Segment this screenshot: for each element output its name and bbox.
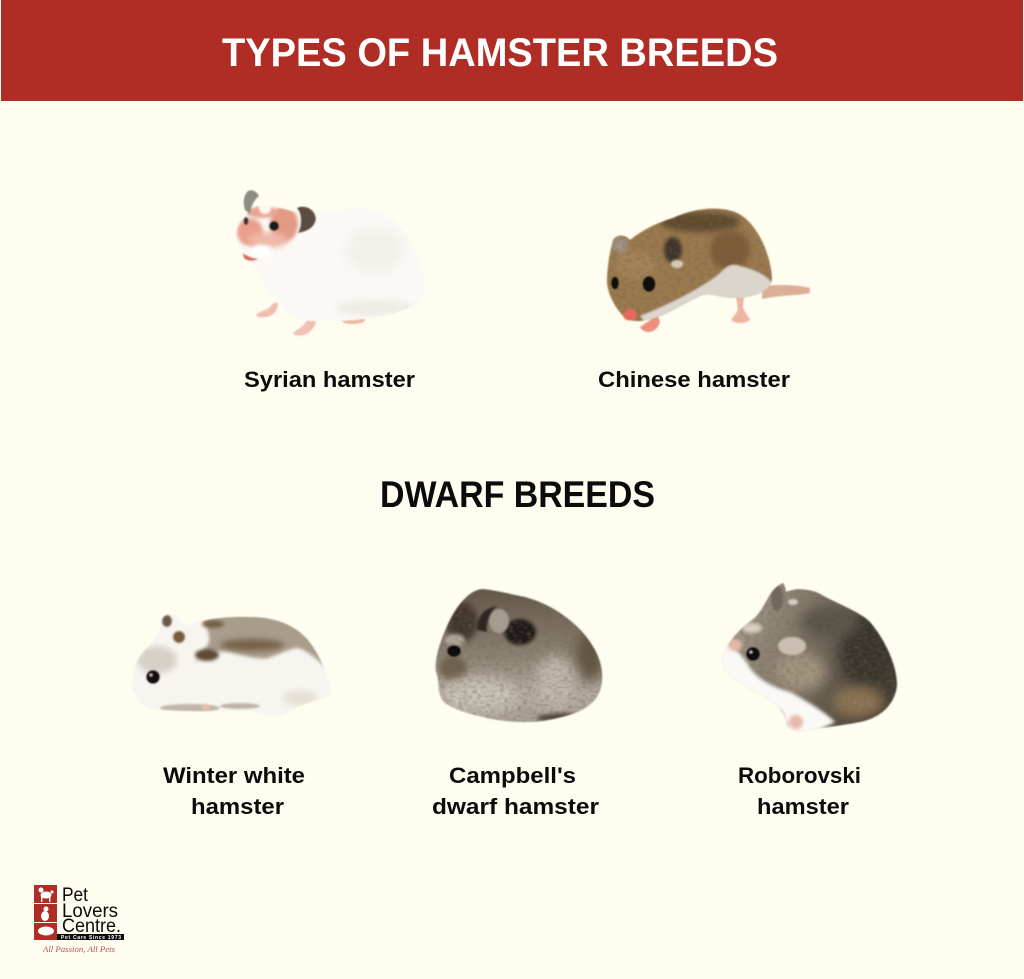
label: Chinese hamster: Chinese hamster — [598, 367, 790, 392]
illustration: Syrian hamster — [236, 190, 412, 336]
illustration: Winter white hamster — [135, 614, 324, 712]
panel: Syrian hamster — [236, 190, 412, 336]
label: Roborovski hamster: hamster — [757, 794, 849, 819]
logo wordmark — [62, 885, 121, 937]
label: Syrian hamster: Syrian hamster — [244, 367, 415, 392]
label: Campbell's dwarf hamster: Campbell's — [449, 763, 576, 788]
panel: Campbell's dwarf hamster — [434, 588, 604, 723]
panel: Winter white hamster — [135, 614, 324, 712]
title banner — [1, 0, 1023, 101]
logo wordmark: Centre. — [62, 916, 121, 937]
illustration: Roborovski hamster — [726, 582, 898, 732]
label: Winter white hamster: hamster — [191, 794, 284, 819]
label: Winter white hamster: Winter white — [163, 763, 305, 788]
illustration: Campbell's dwarf hamster — [434, 588, 604, 723]
title: TYPES OF HAMSTER BREEDS — [222, 31, 778, 75]
label: Campbell's dwarf hamster — [432, 763, 599, 819]
label: Campbell's dwarf hamster: dwarf hamster — [432, 794, 599, 819]
icon: cat tile — [34, 904, 57, 922]
panel: Chinese hamster — [600, 205, 810, 332]
label: Roborovski hamster — [738, 763, 861, 819]
label: Roborovski hamster: Roborovski — [738, 763, 861, 788]
logo: Pet Lovers Centre — [34, 885, 124, 954]
panel: Roborovski hamster — [726, 582, 898, 732]
icon: dog tile — [34, 885, 57, 903]
logo tagline: All Passion, All Pets — [42, 944, 116, 954]
icon: small pet tile — [34, 923, 57, 940]
heading: dwarf breeds: DWARF BREEDS — [380, 474, 655, 515]
logo wordmark: Lovers — [62, 901, 118, 922]
logo wordmark: Pet — [62, 885, 89, 906]
label: Winter white hamster — [163, 763, 305, 819]
logo strapline bar: Pet Care Since 1973 — [61, 935, 121, 941]
illustration: Chinese hamster — [600, 205, 810, 332]
